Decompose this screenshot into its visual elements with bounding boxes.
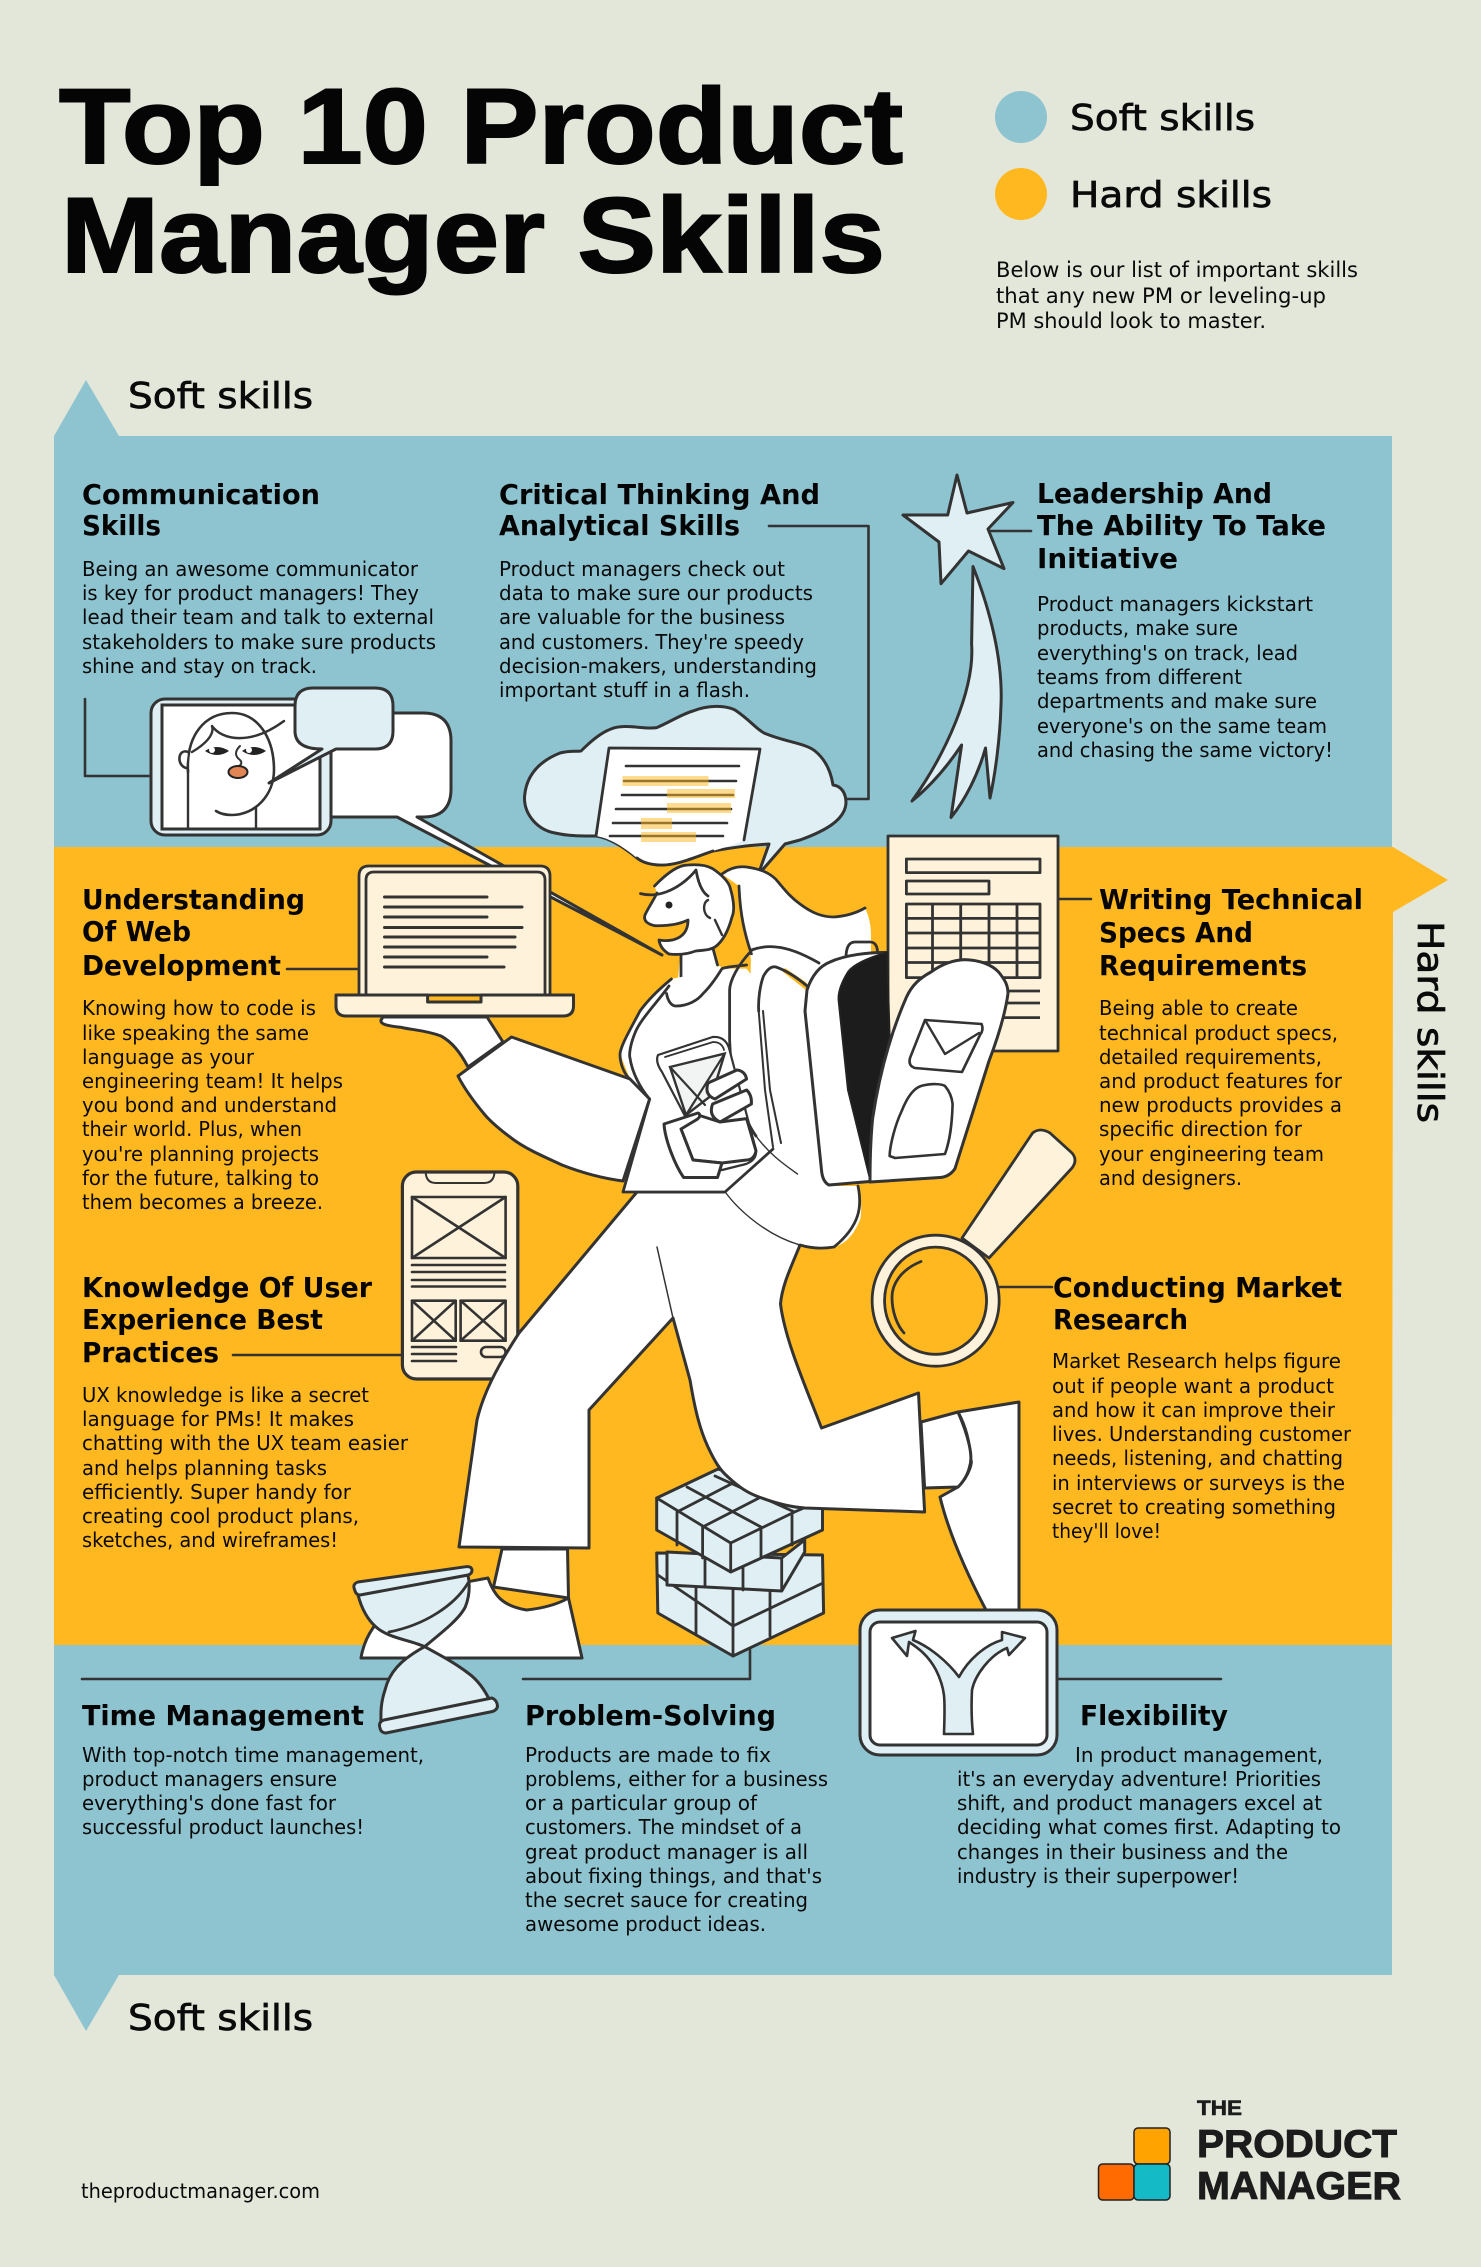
text: critical thinking: and customers. They're speedy: [499, 630, 804, 654]
text: time management: everything's done fast for: [82, 1791, 337, 1815]
text: problem-solving: problems, either for a business: [525, 1767, 828, 1791]
heading: flexibility: Flexibility: [1080, 1699, 1228, 1732]
text: technical specs: detailed requirements,: [1099, 1045, 1322, 1069]
heading: web development: Of Web: [82, 915, 191, 948]
heading: technical specs: Specs And: [1099, 916, 1253, 949]
text: market research: and how it can improve their: [1052, 1398, 1336, 1422]
text: communication skills: lead their team and talk to external: [82, 605, 434, 629]
text: flexibility: it's an everyday adventure! Priorities: [957, 1767, 1321, 1791]
text: market research: Market Research helps figure: [1052, 1349, 1341, 1373]
logo: THE: [1197, 2097, 1242, 2120]
text: technical specs: your engineering team: [1099, 1142, 1324, 1166]
pants: [459, 1192, 925, 1548]
legend: Hard skills: [1070, 175, 1272, 216]
text: technical specs: and designers.: [1099, 1166, 1242, 1190]
text: web development: engineering team! It helps: [82, 1069, 343, 1093]
text: ux best practices: sketches, and wireframes!: [82, 1528, 338, 1552]
title: Manager Skills: [61, 175, 885, 295]
heading: leadership: Initiative: [1037, 542, 1178, 575]
text: web development: them becomes a breeze.: [82, 1190, 323, 1214]
title: [59, 66, 903, 295]
title: Top 10 Product: [59, 66, 903, 186]
text: problem-solving: great product manager is all: [525, 1840, 808, 1864]
logo: [1098, 2097, 1401, 2208]
text: communication skills: Being an awesome communicator: [82, 557, 419, 581]
heading: web development: Understanding: [82, 883, 305, 916]
backpack body: [805, 952, 887, 1185]
text: leadership: products, make sure: [1037, 616, 1238, 640]
text: communication skills: stakeholders to make sure products: [82, 630, 436, 654]
text: ux best practices: UX knowledge is like a secret: [82, 1383, 369, 1407]
heading: critical thinking: [499, 478, 820, 542]
envelope pocket: [910, 1020, 982, 1072]
illustration: hourglass: [354, 1567, 498, 1733]
text: leadership: teams from different: [1037, 665, 1242, 689]
text: problem-solving: Products are made to fix: [525, 1743, 771, 1767]
text: technical specs: Being able to create: [1099, 996, 1298, 1020]
text: problem-solving: about fixing things, and that's: [525, 1864, 822, 1888]
panel: top soft skills band: [54, 376, 1392, 847]
intro text: Below is our list of important skills: [996, 258, 1358, 282]
puzzle cube: [657, 1469, 824, 1656]
heading: communication skills: Skills: [82, 509, 161, 542]
text: ux best practices: efficiently. Super handy for: [82, 1480, 352, 1504]
text: web development: [82, 996, 343, 1214]
text: leadership: departments and make sure: [1037, 689, 1317, 713]
heading: communication skills: [82, 478, 320, 542]
footer url: theproductmanager.com: [81, 2179, 320, 2203]
text: web development: you're planning projects: [82, 1142, 319, 1166]
legend: [995, 91, 1272, 220]
illustration: laptop: [336, 866, 574, 1016]
panel: top soft skills band: Soft skills: [128, 376, 313, 417]
connector lines: [82, 526, 1221, 1679]
text: leadership: everyone's on the same team: [1037, 714, 1327, 738]
text: time management: [82, 1743, 424, 1839]
text: critical thinking: data to make sure our products: [499, 581, 813, 605]
illustration: fork-in-road sign: [860, 1610, 1057, 1755]
heading: technical specs: [1099, 883, 1363, 982]
intro text: [996, 258, 1358, 333]
text: problem-solving: [525, 1743, 828, 1936]
text: market research: in interviews or surveys is the: [1052, 1471, 1345, 1495]
torso: [620, 969, 773, 1192]
text: leadership: [1037, 592, 1333, 762]
text: ux best practices: chatting with the UX team easier: [82, 1431, 409, 1455]
text: flexibility: [957, 1743, 1341, 1888]
heading: web development: Development: [82, 949, 281, 982]
text: time management: successful product launches!: [82, 1815, 364, 1839]
intro text: PM should look to master.: [996, 309, 1266, 333]
text: technical specs: technical product specs,: [1099, 1021, 1338, 1045]
heading: critical thinking: Analytical Skills: [499, 509, 740, 542]
panel: bottom soft skills band: [54, 1645, 1392, 2039]
illustration: wireframe phone: [402, 1172, 518, 1379]
text: technical specs: new products provides a: [1099, 1093, 1342, 1117]
text: problem-solving: or a particular group of: [525, 1791, 758, 1815]
text: problem-solving: the secret sauce for creating: [525, 1888, 808, 1912]
text: communication skills: is key for product managers! They: [82, 581, 419, 605]
text: time management: product managers ensure: [82, 1767, 337, 1791]
heading: web development: [82, 883, 305, 982]
white backing for strap and right sleeve: [718, 955, 861, 1249]
text: market research: they'll love!: [1052, 1519, 1161, 1543]
heading: leadership: [1037, 477, 1326, 575]
panel: bottom soft skills band: Soft skills: [128, 1998, 313, 2039]
backpack flap: [870, 960, 1008, 1182]
text: ux best practices: language for PMs! It makes: [82, 1407, 354, 1431]
backpack strap: [730, 951, 756, 1136]
heading: problem-solving: Problem-Solving: [525, 1699, 776, 1732]
text: web development: Knowing how to code is: [82, 996, 316, 1020]
text: leadership: and chasing the same victory!: [1037, 738, 1333, 762]
text: web development: their world. Plus, when: [82, 1117, 302, 1141]
text: technical specs: [1099, 996, 1343, 1190]
heading: leadership: The Ability To Take: [1037, 509, 1326, 542]
heading: ux best practices: [82, 1271, 372, 1369]
illustration: shooting star: [903, 475, 1013, 818]
text: flexibility: deciding what comes first. Adapting to: [957, 1815, 1341, 1839]
text: problem-solving: customers. The mindset of a: [525, 1815, 802, 1839]
text: critical thinking: important stuff in a flash.: [499, 678, 750, 702]
heading: ux best practices: Knowledge Of User: [82, 1271, 372, 1304]
front pocket: [890, 1084, 953, 1158]
ponytail: [722, 867, 871, 990]
text: communication skills: shine and stay on track.: [82, 654, 317, 678]
text: leadership: Product managers kickstart: [1037, 592, 1313, 616]
text: ux best practices: [82, 1383, 409, 1552]
text: flexibility: In product management,: [1075, 1743, 1323, 1767]
text: market research: lives. Understanding customer: [1052, 1422, 1352, 1446]
intro text: that any new PM or leveling-up: [996, 284, 1326, 308]
illustration: magnifying glass: [872, 1130, 1075, 1366]
left sleeve: [458, 1037, 650, 1181]
head: [645, 865, 734, 955]
text: market research: needs, listening, and chatting: [1052, 1446, 1343, 1470]
text: web development: you bond and understand: [82, 1093, 337, 1117]
text: ux best practices: creating cool product plans,: [82, 1504, 359, 1528]
heading: time management: Time Management: [82, 1699, 364, 1732]
illustration: video call tablet with speech bubbles: [151, 688, 662, 955]
text: market research: secret to creating something: [1052, 1495, 1336, 1519]
logo: PRODUCT: [1197, 2123, 1397, 2166]
text: time management: With top-notch time management,: [82, 1743, 424, 1767]
text: flexibility: shift, and product managers excel at: [957, 1791, 1322, 1815]
legend: Soft skills: [1070, 98, 1255, 139]
left sock: [494, 1549, 568, 1598]
heading: market research: Conducting Market: [1053, 1271, 1342, 1304]
text: web development: for the future, talking to: [82, 1166, 319, 1190]
left hand: [381, 1017, 503, 1067]
illustration: product manager figure: [361, 865, 1019, 1658]
heading: market research: [1053, 1271, 1342, 1336]
text: web development: like speaking the same: [82, 1021, 309, 1045]
logo: MANAGER: [1197, 2165, 1401, 2208]
text: critical thinking: are valuable for the business: [499, 605, 785, 629]
neck: [665, 940, 735, 1012]
heading: market research: Research: [1053, 1303, 1188, 1336]
heading: technical specs: Requirements: [1099, 949, 1307, 982]
illustration: thought cloud with document: [524, 706, 846, 875]
phone in hand: [657, 1037, 756, 1178]
text: communication skills: [82, 557, 436, 678]
text: critical thinking: decision-makers, understanding: [499, 654, 817, 678]
text: technical specs: and product features for: [1099, 1069, 1343, 1093]
text: critical thinking: [499, 557, 817, 702]
text: problem-solving: awesome product ideas.: [525, 1912, 766, 1936]
heading: critical thinking: Critical Thinking And: [499, 478, 820, 511]
text: market research: [1052, 1349, 1352, 1543]
left shoe: [361, 1578, 582, 1658]
text: technical specs: specific direction for: [1099, 1117, 1303, 1141]
heading: communication skills: Communication: [82, 478, 320, 511]
text: market research: out if people want a product: [1052, 1374, 1334, 1398]
text: flexibility: industry is their superpower!: [957, 1864, 1239, 1888]
text: critical thinking: Product managers check out: [499, 557, 785, 581]
text: flexibility: changes in their business and the: [957, 1840, 1288, 1864]
text: leadership: everything's on track, lead: [1037, 641, 1298, 665]
right lower leg and shoe: [940, 1402, 1019, 1610]
heading: ux best practices: Experience Best: [82, 1303, 323, 1336]
heading: leadership: Leadership And: [1037, 477, 1272, 510]
heading: technical specs: Writing Technical: [1099, 883, 1363, 916]
text: web development: language as your: [82, 1045, 255, 1069]
panel: hard skills band: Hard skills: [1409, 921, 1450, 1123]
backpack handle: [846, 942, 878, 958]
illustration: spec document: [888, 836, 1058, 1051]
heading: ux best practices: Practices: [82, 1336, 219, 1369]
text: ux best practices: and helps planning tasks: [82, 1456, 327, 1480]
